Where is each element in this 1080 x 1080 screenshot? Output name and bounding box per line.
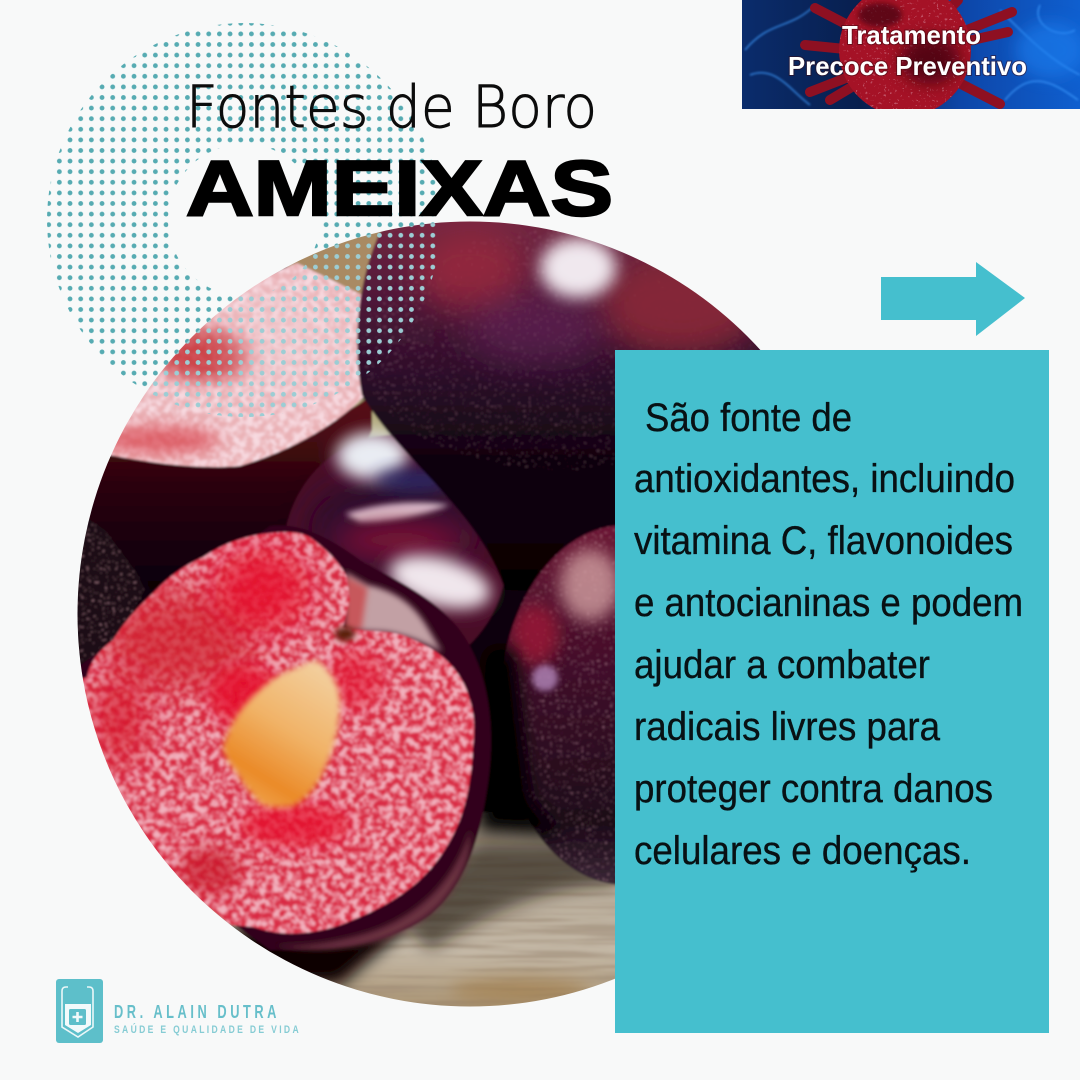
- far left dark plum: [78, 519, 146, 664]
- body text: antioxidantes, incluindo: [634, 457, 1015, 501]
- body text: e antocianinas e podem: [634, 581, 1023, 625]
- body text: vitamina C, flavonoides: [634, 519, 1013, 563]
- back left cut plum: flesh: [110, 262, 366, 470]
- dark shadow between plums: [480, 650, 560, 835]
- banner title: [788, 25, 1027, 76]
- header banner: virus image with title: [742, 0, 1080, 116]
- logo name: DR. ALAIN DUTRA: [114, 1002, 280, 1022]
- front cut plum: flesh: [82, 530, 476, 936]
- text panel: [615, 350, 1049, 1033]
- heading line: Fontes de Boro: Fontes de Boro: [186, 73, 597, 141]
- blue light filaments: [745, 5, 1080, 105]
- big top plum: [356, 222, 760, 592]
- tan table background, top left: [286, 232, 382, 296]
- arrow pointing right: [881, 262, 1025, 336]
- body text: proteger contra danos: [634, 767, 993, 811]
- red virus: [805, 0, 1012, 116]
- icon: medical bag: [56, 979, 103, 1043]
- right plum: [504, 524, 615, 886]
- logo: Dr. Alain Dutra: [56, 979, 301, 1043]
- banner title: Tratamento: [842, 20, 981, 50]
- photo: plums in a circular crop: [78, 222, 760, 1006]
- wood table: [200, 812, 620, 1012]
- front plum: cavity near the stem: [345, 572, 442, 652]
- body text: ajudar a combater: [634, 643, 930, 687]
- body text: radicais livres para: [634, 705, 941, 749]
- halftone dotted ring: [47, 23, 436, 386]
- back left cut plum: skin: [89, 398, 374, 590]
- middle plum with highlights: [283, 432, 507, 675]
- plum stone: [223, 660, 340, 807]
- logo tagline: SAÚDE E QUALIDADE DE VIDA: [114, 1023, 301, 1036]
- body text: São fonte de: [645, 396, 852, 440]
- body text: celulares e doenças.: [634, 829, 971, 873]
- plum pit tip: [335, 627, 355, 641]
- page heading: [186, 73, 613, 232]
- light halftone dots over the photo: [153, 223, 436, 417]
- heading line: AMEIXAS: AMEIXAS: [186, 144, 613, 232]
- banner title: Precoce Preventivo: [788, 51, 1027, 81]
- body text: [634, 396, 1023, 873]
- front cut plum: skin: [60, 525, 491, 950]
